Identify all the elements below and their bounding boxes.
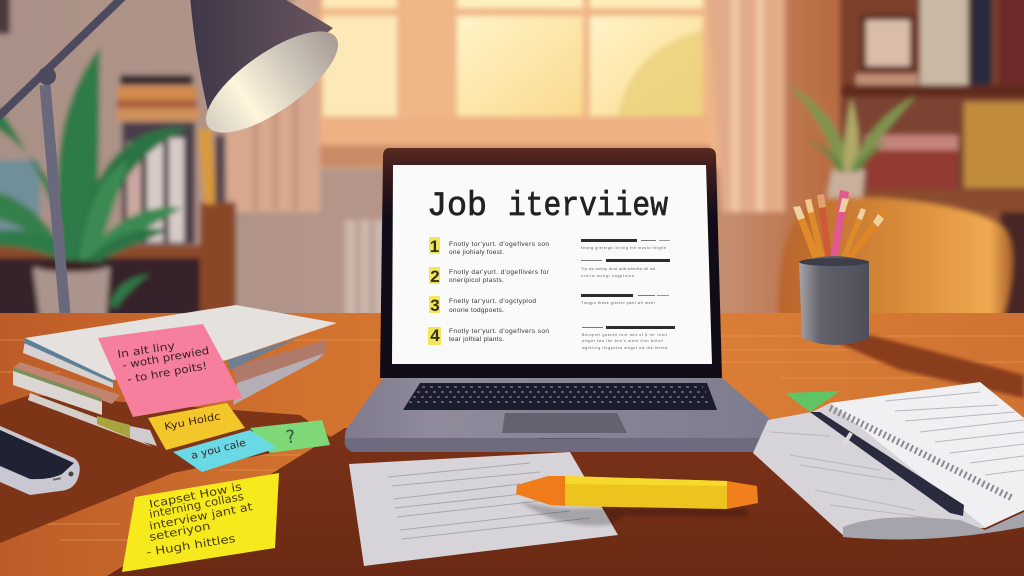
- item 2: 2: [430, 267, 440, 286]
- notebook tab: [785, 391, 840, 412]
- wall picture frame: [0, 0, 10, 34]
- chair: [778, 197, 1013, 320]
- highlighter tip: [516, 476, 565, 506]
- bottom book: [28, 393, 153, 447]
- note 4: wgntlnrg lfngpntns mngnt nw lhk fbrlnd: [582, 346, 667, 350]
- sticky note: cyan: a you cale: [190, 438, 247, 462]
- screen title: [427, 188, 669, 226]
- smartphone: [0, 426, 80, 495]
- pink note handwriting: - woth prewied: [121, 345, 210, 372]
- lamp arm: [0, 0, 125, 120]
- lamp opening: [191, 14, 353, 150]
- note 2: Try wo enbny dunt adb whnrba tdl wd: [581, 267, 655, 271]
- item 2: oneripicol plasts.: [449, 277, 504, 284]
- right side of books: [233, 353, 325, 405]
- note 4: pmgnt twn lhn bnn's mntn tfnn bdlnrl: [582, 339, 663, 343]
- note 3: Tnngpn fbnsk greisnt pwnt wll mstlr: [581, 301, 656, 305]
- pink note handwriting: [117, 340, 210, 386]
- item 2: Fnotly dar'yurt. d'ogeflivers for: [449, 269, 550, 276]
- item 3: [429, 296, 536, 315]
- loose paper on books: [25, 305, 337, 380]
- desk shadow: books: [0, 395, 335, 543]
- lamp shade: [190, 0, 333, 128]
- yellow note handwriting: [145, 480, 254, 559]
- item 3: 3: [430, 296, 440, 315]
- notebook right page: [830, 382, 1024, 528]
- sticky note: yellow small: Kyu Holdc: [163, 411, 222, 433]
- item 3: Fnetly tar'yurt. d'ogclyplod: [449, 298, 536, 305]
- item 1: one jiohialy foest.: [449, 249, 504, 256]
- laptop: [345, 148, 784, 452]
- laptop base: [345, 378, 784, 452]
- item 4: tear jolhial plants.: [449, 336, 504, 343]
- sticky note: green: ?: [285, 426, 297, 448]
- notebook page stack: [843, 512, 1024, 539]
- item 4: Fnotly ter'yurt. d'ogeflvers son: [449, 328, 549, 335]
- notebook left page: [753, 403, 985, 537]
- laptop display: [392, 165, 712, 364]
- sticky note: yellow small: [148, 403, 245, 450]
- yellow note handwriting: - Hugh hittles: [145, 532, 237, 559]
- spiral notebook: [753, 382, 1024, 539]
- trackpad: [502, 413, 627, 433]
- highlighter shadow: [520, 502, 750, 526]
- loose paper sheet: [349, 452, 618, 566]
- item 1: Fnotly tor'yurt. d'ogeflvers son: [449, 241, 549, 248]
- desk lamp: [0, 0, 353, 314]
- pencils: [793, 190, 888, 262]
- left plant: [0, 48, 190, 320]
- yellow note handwriting: seteriyon: [148, 519, 211, 544]
- note 4: Bnrnpnrt goenttl tonr mnt of 5 fm' lntnt: [582, 333, 667, 337]
- item 3: onorie todgpoets.: [449, 307, 504, 314]
- radiator: [345, 220, 385, 320]
- sticky note: pink: [98, 324, 243, 417]
- item 2: [429, 267, 550, 286]
- plant pot: [33, 262, 110, 320]
- keyboard: [403, 383, 717, 410]
- right plant: [787, 85, 916, 202]
- note 1: Nrang greisrgd lnrfing lnn mostd fnrgtle: [581, 246, 666, 250]
- window: [310, 0, 720, 168]
- top book: [23, 340, 113, 388]
- pink note handwriting: - to hre poits!: [126, 360, 208, 386]
- cup: [799, 256, 869, 345]
- highlighter body: [565, 476, 727, 509]
- desk shadow: cup: [820, 335, 1024, 398]
- numbered list: [428, 237, 550, 345]
- stack of books: [13, 305, 337, 447]
- item 4: [428, 326, 549, 345]
- curtains: [225, 0, 785, 212]
- sticky note: green: [250, 420, 330, 453]
- pink note handwriting: In alt liny: [117, 340, 176, 361]
- yellow note handwriting: interning collass: [148, 490, 245, 521]
- screen title: iterviiew: [508, 188, 669, 226]
- pen: [810, 412, 964, 516]
- pencil cup with pencils: [793, 190, 888, 345]
- left bookshelf: [0, 75, 236, 320]
- right column notes: [581, 239, 675, 350]
- laptop screen bezel: [380, 148, 722, 378]
- wooden desk: [0, 313, 1024, 576]
- item 1: 1: [430, 237, 439, 256]
- sticky note: cyan: [173, 430, 277, 472]
- note 2: urorla mcugl ongptntse: [581, 274, 634, 278]
- screen title: Job: [427, 188, 487, 226]
- highlighter: [516, 476, 758, 526]
- desk shadow: laptop: [107, 428, 1024, 576]
- room background: [0, 0, 1024, 320]
- note 2: [581, 259, 670, 278]
- sticky note: yellow large: [122, 473, 279, 572]
- yellow note handwriting: Icapset How is: [148, 480, 243, 511]
- yellow note handwriting: interview jant at: [148, 500, 254, 533]
- plant leaves: [0, 48, 190, 270]
- middle book: [13, 368, 102, 415]
- notebook spiral: [830, 408, 1012, 498]
- item 1: [429, 237, 549, 256]
- right bookshelf: [840, 0, 1024, 320]
- highlighter cap: [727, 481, 758, 509]
- note 4: [582, 326, 675, 350]
- item 4: 4: [430, 326, 440, 345]
